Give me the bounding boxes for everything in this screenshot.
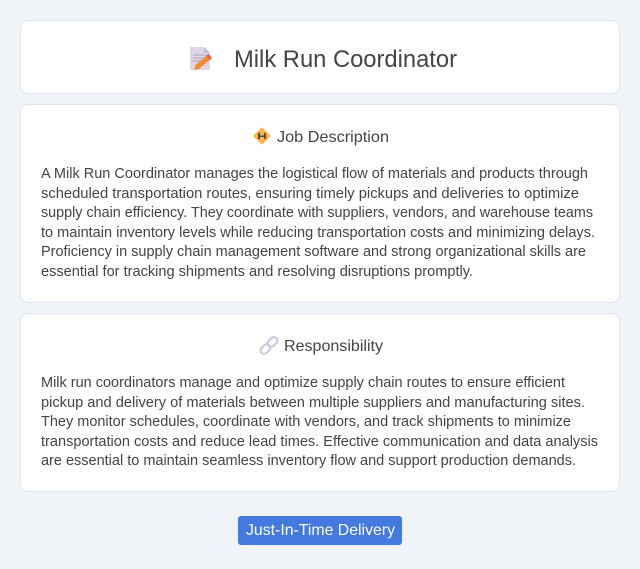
heading: responsibility: Responsibility [284,338,383,355]
heading: title: Milk Run Coordinator [234,46,457,73]
icon: document with pencil [190,47,212,70]
icon: chain link [259,336,279,355]
text: responsibility body: are essential to maintain seamless inventory flow and support production demands. [41,453,576,469]
panel: job description [20,104,620,302]
heading: job description: Job Description [277,129,389,146]
panel: title [20,20,620,94]
text: responsibility body: pickup and delivery of materials between multiple suppliers and manufacturing sites. [41,395,585,411]
text: job description body: scheduled transportation routes, ensuring timely pickups and deliveries to optimize [41,186,579,202]
text: job description body: Proficiency in supply chain management software and strong organizational skills are [41,244,586,260]
button: Just-In-Time Delivery [238,516,402,545]
text: job description body: A Milk Run Coordinator manages the logistical flow of materials and products through [41,166,588,182]
text: job description body: to maintain inventory levels while reducing transportation costs and minimizing delays. [41,225,595,241]
text: job description body [41,166,595,280]
panel: responsibility [20,314,620,492]
button: Just-In-Time Delivery: Just-In-Time Delivery [246,522,395,539]
text: job description body: supply chain efficiency. They coordinate with suppliers, vendors, and warehouse teams [41,205,593,221]
text: job description body: essential for tracking shipments and resolving disruptions promptly. [41,264,473,280]
text: responsibility body: They monitor schedules, coordinate with vendors, and track shipments to minimize [41,414,571,430]
text: responsibility body: Milk run coordinators manage and optimize supply chain routes to ensure efficient [41,375,565,391]
icon: diamond road sign [254,128,270,144]
text: responsibility body [41,375,598,469]
text: responsibility body: transportation costs and reduce lead times. Effective communication and data analysis [41,434,598,450]
